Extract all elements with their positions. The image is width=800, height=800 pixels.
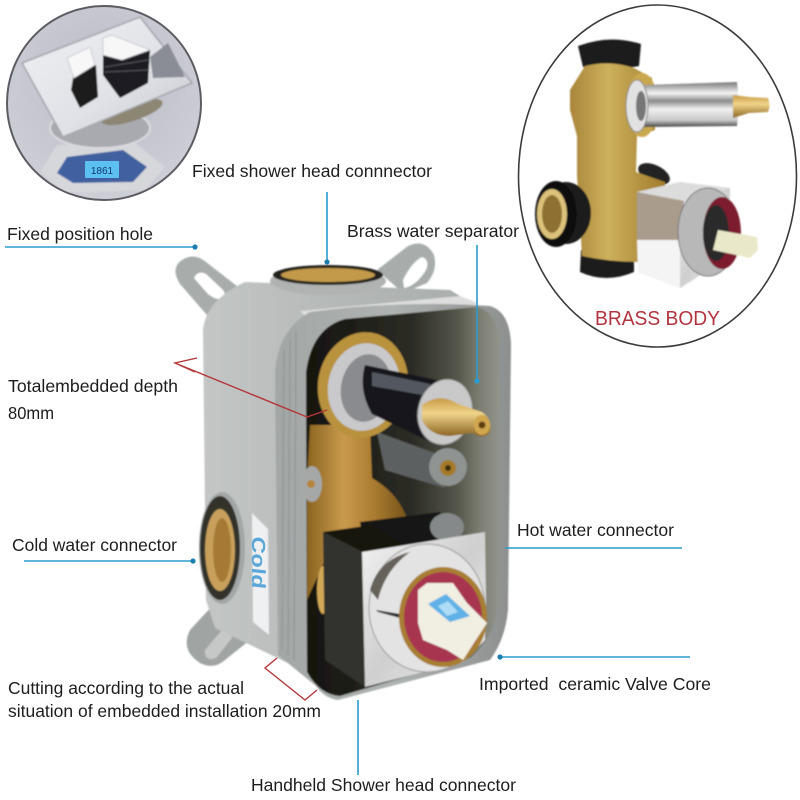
callout: brass water separator: Brass water separator	[347, 221, 519, 241]
callout: total embedded depth: 80mm	[8, 403, 54, 423]
scale display panel	[57, 150, 147, 183]
callout: fixed shower head connector: Fixed shower head connnector	[192, 161, 432, 181]
brass spindle	[422, 398, 491, 436]
top black cap	[578, 39, 641, 69]
chrome plate	[22, 17, 192, 137]
cold water side port	[199, 492, 245, 604]
inset: brass body oval	[518, 5, 796, 347]
white ceramic key	[418, 583, 487, 660]
blue insert	[428, 594, 470, 622]
cold label sticker	[252, 513, 269, 635]
brass spindle tip	[733, 95, 770, 118]
callout: cutting depth 20mm	[8, 658, 321, 721]
bottom black cap	[580, 250, 634, 278]
callout: cold water connector	[12, 535, 196, 564]
callout: brass water separator	[347, 221, 519, 384]
top water port	[270, 265, 386, 295]
box front rim	[275, 304, 511, 700]
cold label text: Cold	[247, 535, 268, 590]
callout: cold water connector: Cold water connector	[12, 535, 177, 555]
callout: total embedded depth: Totalembedded depth	[8, 376, 178, 396]
chrome stem	[626, 73, 770, 137]
upper valve cartridge	[309, 325, 491, 451]
small knob	[67, 47, 98, 108]
left brass fitting	[317, 566, 329, 614]
large knob	[103, 35, 150, 98]
scale base	[40, 141, 165, 193]
brass and red seat	[399, 567, 487, 667]
rear black port	[635, 159, 673, 189]
callout: ceramic valve core: Imported ceramic Valve Core	[479, 674, 711, 694]
callout: fixed position hole	[5, 224, 198, 250]
chrome cube handle	[323, 525, 487, 687]
main valve box	[175, 243, 511, 700]
left black port	[535, 181, 591, 247]
mounting lug top left	[175, 256, 242, 322]
mounting lug top right	[377, 243, 435, 293]
callout: ceramic valve core	[479, 654, 711, 694]
callout: handheld shower head connector: Handheld Shower head connector	[251, 775, 516, 795]
plate recess	[150, 43, 185, 78]
inset: scale photo circle	[7, 6, 201, 200]
top face highlight strip	[300, 296, 478, 322]
brass column	[307, 425, 412, 600]
scale LCD reading: 1861	[91, 166, 114, 177]
black cylinder	[363, 365, 437, 442]
box interior wall	[306, 307, 500, 696]
white ceramic key	[713, 230, 758, 258]
callout: fixed shower head connector	[192, 161, 432, 265]
rear black tube with grey cap	[360, 512, 464, 556]
grey rear tube and disc	[377, 432, 467, 488]
mounting lug bottom	[187, 604, 250, 666]
scale LCD reading	[85, 161, 119, 178]
callout: total embedded depth	[8, 358, 327, 423]
chrome collar	[411, 373, 479, 451]
chrome cube handle	[637, 182, 758, 288]
chrome escutcheon	[369, 544, 485, 672]
brass body	[570, 63, 665, 262]
callout: fixed position hole: Fixed position hole	[7, 224, 153, 244]
brass body caption: BRASS BODY	[595, 308, 720, 330]
callout: hot water connector: Hot water connector	[517, 520, 674, 540]
callout: cutting depth 20mm: situation of embedded installation 20mm	[8, 701, 321, 721]
mounting post left	[302, 466, 322, 502]
box side panel	[203, 282, 480, 664]
callout: cutting depth 20mm: Cutting according to the actual	[8, 678, 244, 698]
